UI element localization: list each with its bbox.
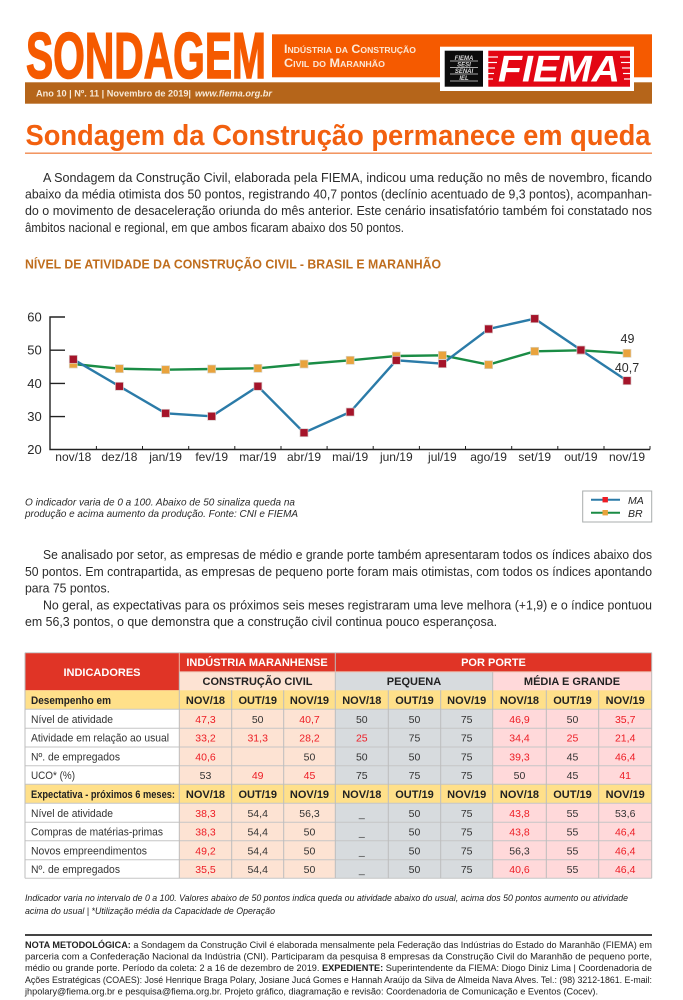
table group headers: CONSTRUÇÃO CIVIL xyxy=(202,675,313,688)
row: Nível de atividade (expectativa): 55 xyxy=(567,808,578,820)
intro paragraph: abaixo da média otimista dos 50 pontos, registrando 40,7 pontos (declínio acentuado de 9,3 pontos), acompanhan- xyxy=(25,188,652,202)
chart axes: fev/19 xyxy=(195,450,228,464)
row: Nível de atividade (expectativa): 75 xyxy=(461,808,473,820)
row: Atividade em relação ao usual: 34,4 xyxy=(509,733,530,745)
row: Nível de atividade (expectativa): 56,3 xyxy=(299,808,320,820)
row: UCO: 53 xyxy=(200,770,211,782)
table group headers: INDÚSTRIA MARANHENSE xyxy=(186,656,328,669)
chart axes: nov/18 xyxy=(55,450,92,464)
row: Nível de atividade: Nível de atividade xyxy=(31,714,113,726)
table footnote xyxy=(25,893,628,917)
row: Nº. de empregados (expectativa): 50 xyxy=(304,864,315,876)
row: Novos empreendimentos: _ xyxy=(358,845,365,857)
row: Atividade em relação ao usual: 33,2 xyxy=(195,733,216,745)
row: UCO: 45 xyxy=(304,770,315,782)
chart legend: BR xyxy=(628,508,643,520)
row: Novos empreendimentos xyxy=(31,845,636,857)
section row: Expectativa: OUT/19 xyxy=(395,789,434,801)
chart axes: 60 xyxy=(27,310,42,324)
chart axes xyxy=(27,310,650,464)
row: UCO xyxy=(31,770,631,782)
row: Nível de atividade: 50 xyxy=(356,714,368,726)
logo: FIEMA: FIEMA xyxy=(498,49,620,90)
analysis paragraphs xyxy=(25,548,652,629)
chart source note: O indicador varia de 0 a 100. Abaixo de 50 sinaliza queda na xyxy=(25,498,295,508)
table group headers: INDICADORES xyxy=(63,667,141,679)
main headline: Sondagem da Construção permanece em queda xyxy=(26,120,652,152)
row: Nível de atividade (expectativa) xyxy=(31,808,636,820)
section row: Expectativa: NOV/18 xyxy=(500,789,539,801)
intro paragraph: do o movimento de desaceleração oriunda do mês anterior. Este cenário insatisfatório também foi constatado nos xyxy=(25,204,652,218)
row: Compras de matérias-primas: 50 xyxy=(304,827,315,839)
intro paragraph: âmbitos nacional e regional, em que ambos ficaram abaixo dos 50 pontos. xyxy=(25,221,404,235)
row: Nível de atividade (expectativa): Nível de atividade xyxy=(31,808,113,820)
chart axes: 30 xyxy=(27,409,42,424)
row: Nº. de empregados: Nº. de empregados xyxy=(31,751,120,763)
row: Atividade em relação ao usual: 21,4 xyxy=(615,733,636,745)
section row: Desempenho: Desempenho em xyxy=(31,695,111,707)
row: Compras de matérias-primas: 54,4 xyxy=(247,827,268,839)
row: UCO: 75 xyxy=(356,770,368,782)
row: Nível de atividade xyxy=(31,714,636,726)
chart axes: abr/19 xyxy=(287,450,321,464)
logo: FIEMA xyxy=(440,47,634,91)
series: MA xyxy=(69,315,631,437)
table footnote: acima do usual | *Utilização média da Capacidade de Operação xyxy=(25,906,276,917)
line chart xyxy=(27,310,650,464)
row: Nº. de empregados: 50 xyxy=(304,751,315,763)
row: Nível de atividade (expectativa): 54,4 xyxy=(247,808,268,820)
row: Nº. de empregados: 75 xyxy=(461,751,473,763)
row: Nível de atividade: 40,7 xyxy=(299,714,320,726)
chart axes: dez/18 xyxy=(101,450,138,464)
row: Nível de atividade (expectativa): 38,3 xyxy=(195,808,216,820)
row: Novos empreendimentos: 75 xyxy=(461,845,473,857)
section row: Expectativa: NOV/18 xyxy=(186,789,225,801)
row: Compras de matérias-primas: 75 xyxy=(461,827,473,839)
row: Nº. de empregados: 40,6 xyxy=(195,751,216,763)
chart legend: MA xyxy=(628,495,644,507)
methodological note: jhpolary@fiema.org.br e pesquisa@fiema.org.br. Projeto gráfico, diagramação e revisão: Coordenadoria de Comunicação e Eventos (Cocev). xyxy=(24,986,598,998)
series: BR xyxy=(69,346,631,374)
section row: Desempenho: OUT/19 xyxy=(238,695,277,707)
row: Nível de atividade: 35,7 xyxy=(615,714,636,726)
row: Atividade em relação ao usual: 31,3 xyxy=(247,733,268,745)
value label: MA nov/19: 40,7 xyxy=(615,361,639,375)
section row: Desempenho: NOV/19 xyxy=(290,695,329,707)
row: Nº. de empregados (expectativa): 54,4 xyxy=(247,864,268,876)
table group headers: PEQUENA xyxy=(387,676,441,688)
row: Nível de atividade (expectativa): 53,6 xyxy=(615,808,636,820)
row: Novos empreendimentos: 50 xyxy=(409,845,420,857)
row: Nº. de empregados: 50 xyxy=(356,751,368,763)
row: Compras de matérias-primas: 46,4 xyxy=(615,827,636,839)
chart axes: ago/19 xyxy=(470,450,507,464)
row: Nº. de empregados: 50 xyxy=(409,751,420,763)
row: Nível de atividade (expectativa): 50 xyxy=(409,808,420,820)
analysis paragraphs: para 75 pontos. xyxy=(25,582,110,596)
chart axes: set/19 xyxy=(518,450,551,464)
methodological note xyxy=(24,934,652,998)
logo: FIEMA: SENAI xyxy=(455,69,473,75)
section row: Expectativa: NOV/18 xyxy=(342,789,381,801)
row: Nº. de empregados (expectativa): Nº. de empregados xyxy=(31,864,120,876)
table group headers: MÉDIA E GRANDE xyxy=(524,675,620,688)
row: Nível de atividade: 46,9 xyxy=(509,714,530,726)
row: Nível de atividade: 50 xyxy=(567,714,578,726)
row: UCO: UCO* (%) xyxy=(31,770,75,782)
row: Novos empreendimentos: 50 xyxy=(304,845,315,857)
chart axes: out/19 xyxy=(564,450,598,464)
row: Compras de matérias-primas xyxy=(31,827,636,839)
row: Nº. de empregados (expectativa): _ xyxy=(358,864,365,876)
row: UCO: 45 xyxy=(567,770,578,782)
chart heading: NÍVEL DE ATIVIDADE DA CONSTRUÇÃO CIVIL - BRASIL E MARANHÃO xyxy=(25,256,441,271)
row: UCO: 75 xyxy=(461,770,473,782)
section row: Desempenho: NOV/18 xyxy=(186,695,225,707)
row: Compras de matérias-primas: 50 xyxy=(409,827,420,839)
logo: FIEMA: SESI xyxy=(457,62,471,68)
methodological note: parceria com a Confederação Nacional da Indústria (CNI). Participaram da pesquisa 8 empresas da Construção Civil do Maranhão de pequeno porte, xyxy=(25,952,652,962)
row: Nº. de empregados: 46,4 xyxy=(615,751,636,763)
row: Novos empreendimentos: 46,4 xyxy=(615,845,636,857)
chart axes: jun/19 xyxy=(379,450,413,464)
row: Nº. de empregados: 39,3 xyxy=(509,751,530,763)
analysis paragraphs: 50 pontos. Em contrapartida, as empresas de pequeno porte foram mais otimistas, com todos os índices apontando xyxy=(25,565,652,579)
row: Nº. de empregados: 45 xyxy=(567,751,578,763)
row: Atividade em relação ao usual xyxy=(31,733,636,745)
row: Novos empreendimentos: 55 xyxy=(567,845,578,857)
row: Nº. de empregados (expectativa): 50 xyxy=(409,864,420,876)
section row: Expectativa xyxy=(31,789,645,801)
row: Novos empreendimentos: 56,3 xyxy=(509,845,530,857)
row: Novos empreendimentos: Novos empreendimentos xyxy=(31,845,147,857)
brown edition bar xyxy=(25,82,652,104)
analysis paragraphs: Se analisado por setor, as empresas de médio e grande porte também apresentaram todos os índices abaixo dos xyxy=(43,548,652,562)
row: Compras de matérias-primas: 55 xyxy=(567,827,578,839)
logo: FIEMA: IEL xyxy=(459,76,469,82)
row: Nível de atividade: 50 xyxy=(409,714,420,726)
table footnote: Indicador varia no intervalo de 0 a 100. Valores abaixo de 50 pontos indica queda ou atividade abaixo do usual, acima dos 50 pontos aumento ou atividade xyxy=(25,893,628,904)
row: Nº. de empregados (expectativa) xyxy=(31,864,636,876)
row: Atividade em relação ao usual: 25 xyxy=(356,733,368,745)
row: Atividade em relação ao usual: 25 xyxy=(567,733,578,745)
methodological note: NOTA METODOLÓGICA: a Sondagem da Construção Civil é elaborada mensalmente pela Federação das Indústrias do Estado do Maranhão (FIEMA) em xyxy=(25,939,652,951)
section row: Desempenho xyxy=(31,695,645,707)
section row: Desempenho: OUT/19 xyxy=(553,695,592,707)
row: Atividade em relação ao usual: 28,2 xyxy=(299,733,320,745)
row: Atividade em relação ao usual: 75 xyxy=(461,733,473,745)
chart axes: mar/19 xyxy=(239,450,277,464)
chart axes: jul/19 xyxy=(427,450,457,464)
orange subtitle bar: Civil do Maranhão xyxy=(284,58,385,70)
row: Nº. de empregados xyxy=(31,751,636,763)
row: Nível de atividade: 47,3 xyxy=(195,714,216,726)
chart axes: 50 xyxy=(27,343,42,358)
masthead title: SONDAGEM: SONDAGEM xyxy=(26,19,266,92)
row: Compras de matérias-primas: 38,3 xyxy=(195,827,216,839)
intro paragraph: A Sondagem da Construção Civil, elaborada pela FIEMA, indicou uma redução no mês de novembro, ficando xyxy=(43,171,652,185)
table backgrounds xyxy=(25,653,652,878)
row: Nº. de empregados (expectativa): 55 xyxy=(567,864,578,876)
row: UCO: 41 xyxy=(619,770,631,782)
chart source note: produção e acima aumento da produção. Fonte: CNI e FIEMA xyxy=(24,509,298,520)
section row: Desempenho: NOV/19 xyxy=(606,695,645,707)
chart axes: nov/19 xyxy=(609,450,645,464)
section row: Desempenho: NOV/18 xyxy=(342,695,381,707)
section row: Desempenho: NOV/19 xyxy=(447,695,486,707)
table group headers xyxy=(63,656,620,688)
section row: Expectativa: OUT/19 xyxy=(238,789,277,801)
section row: Expectativa: Expectativa - próximos 6 meses: xyxy=(31,789,175,801)
analysis paragraphs: em 56,3 pontos, o que demonstra que a construção civil continua pouco esperançosa. xyxy=(25,615,497,629)
row: Novos empreendimentos: 54,4 xyxy=(247,845,268,857)
analysis paragraphs: No geral, as expectativas para os próximos seis meses registraram uma leve melhora (+1,9) e o índice pontuou xyxy=(43,598,652,612)
row: Nível de atividade: 50 xyxy=(252,714,264,726)
row: Atividade em relação ao usual: Atividade em relação ao usual xyxy=(31,733,169,745)
logo: FIEMA: FIEMA xyxy=(455,56,473,62)
orange subtitle bar xyxy=(272,34,652,77)
row: Nível de atividade (expectativa): 43,8 xyxy=(509,808,530,820)
intro paragraph xyxy=(25,171,652,235)
row: Nº. de empregados (expectativa): 35,5 xyxy=(195,864,216,876)
row: UCO: 49 xyxy=(252,770,264,782)
row: Compras de matérias-primas: 43,8 xyxy=(509,827,530,839)
data table xyxy=(25,653,652,878)
methodological note: médio ou grande porte. Período da coleta: 2 a 16 de dezembro de 2019. EXPEDIENTE: Superintendente da FIEMA: Diogo Diniz Lima | Coordenadoria de xyxy=(25,963,652,974)
row: Nº. de empregados (expectativa): 75 xyxy=(461,864,473,876)
value label: BR nov/19: 49 xyxy=(621,332,634,346)
chart legend xyxy=(583,491,652,522)
row: Nº. de empregados (expectativa): 46,4 xyxy=(615,864,636,876)
chart axes: 20 xyxy=(27,442,42,457)
row: Atividade em relação ao usual: 75 xyxy=(409,733,420,745)
row: Compras de matérias-primas: _ xyxy=(358,827,365,839)
table group headers: POR PORTE xyxy=(461,657,526,669)
section row: Expectativa: NOV/19 xyxy=(447,789,486,801)
row: UCO: 75 xyxy=(409,770,420,782)
orange subtitle bar: Indústria da Construção xyxy=(284,44,416,56)
row: UCO: 50 xyxy=(514,770,525,782)
header banner xyxy=(25,19,652,104)
section row: Desempenho: NOV/18 xyxy=(500,695,539,707)
chart axes: mai/19 xyxy=(332,450,369,464)
row: Nº. de empregados (expectativa): 40,6 xyxy=(509,864,530,876)
brown edition bar: www.fiema.org.br xyxy=(195,89,273,100)
row: Nível de atividade: 75 xyxy=(461,714,473,726)
row: Novos empreendimentos: 49,2 xyxy=(195,845,216,857)
section row: Expectativa: NOV/19 xyxy=(606,789,645,801)
chart axes: jan/19 xyxy=(148,450,182,464)
chart axes: 40 xyxy=(27,376,42,391)
row: Nível de atividade (expectativa): _ xyxy=(358,808,365,820)
chart source note xyxy=(24,498,298,520)
section row: Expectativa: OUT/19 xyxy=(553,789,592,801)
section row: Expectativa: NOV/19 xyxy=(290,789,329,801)
row: Compras de matérias-primas: Compras de matérias-primas xyxy=(31,827,163,839)
section row: Desempenho: OUT/19 xyxy=(395,695,434,707)
brown edition bar: Ano 10 | Nº. 11 | Novembro de 2019| xyxy=(36,89,191,100)
